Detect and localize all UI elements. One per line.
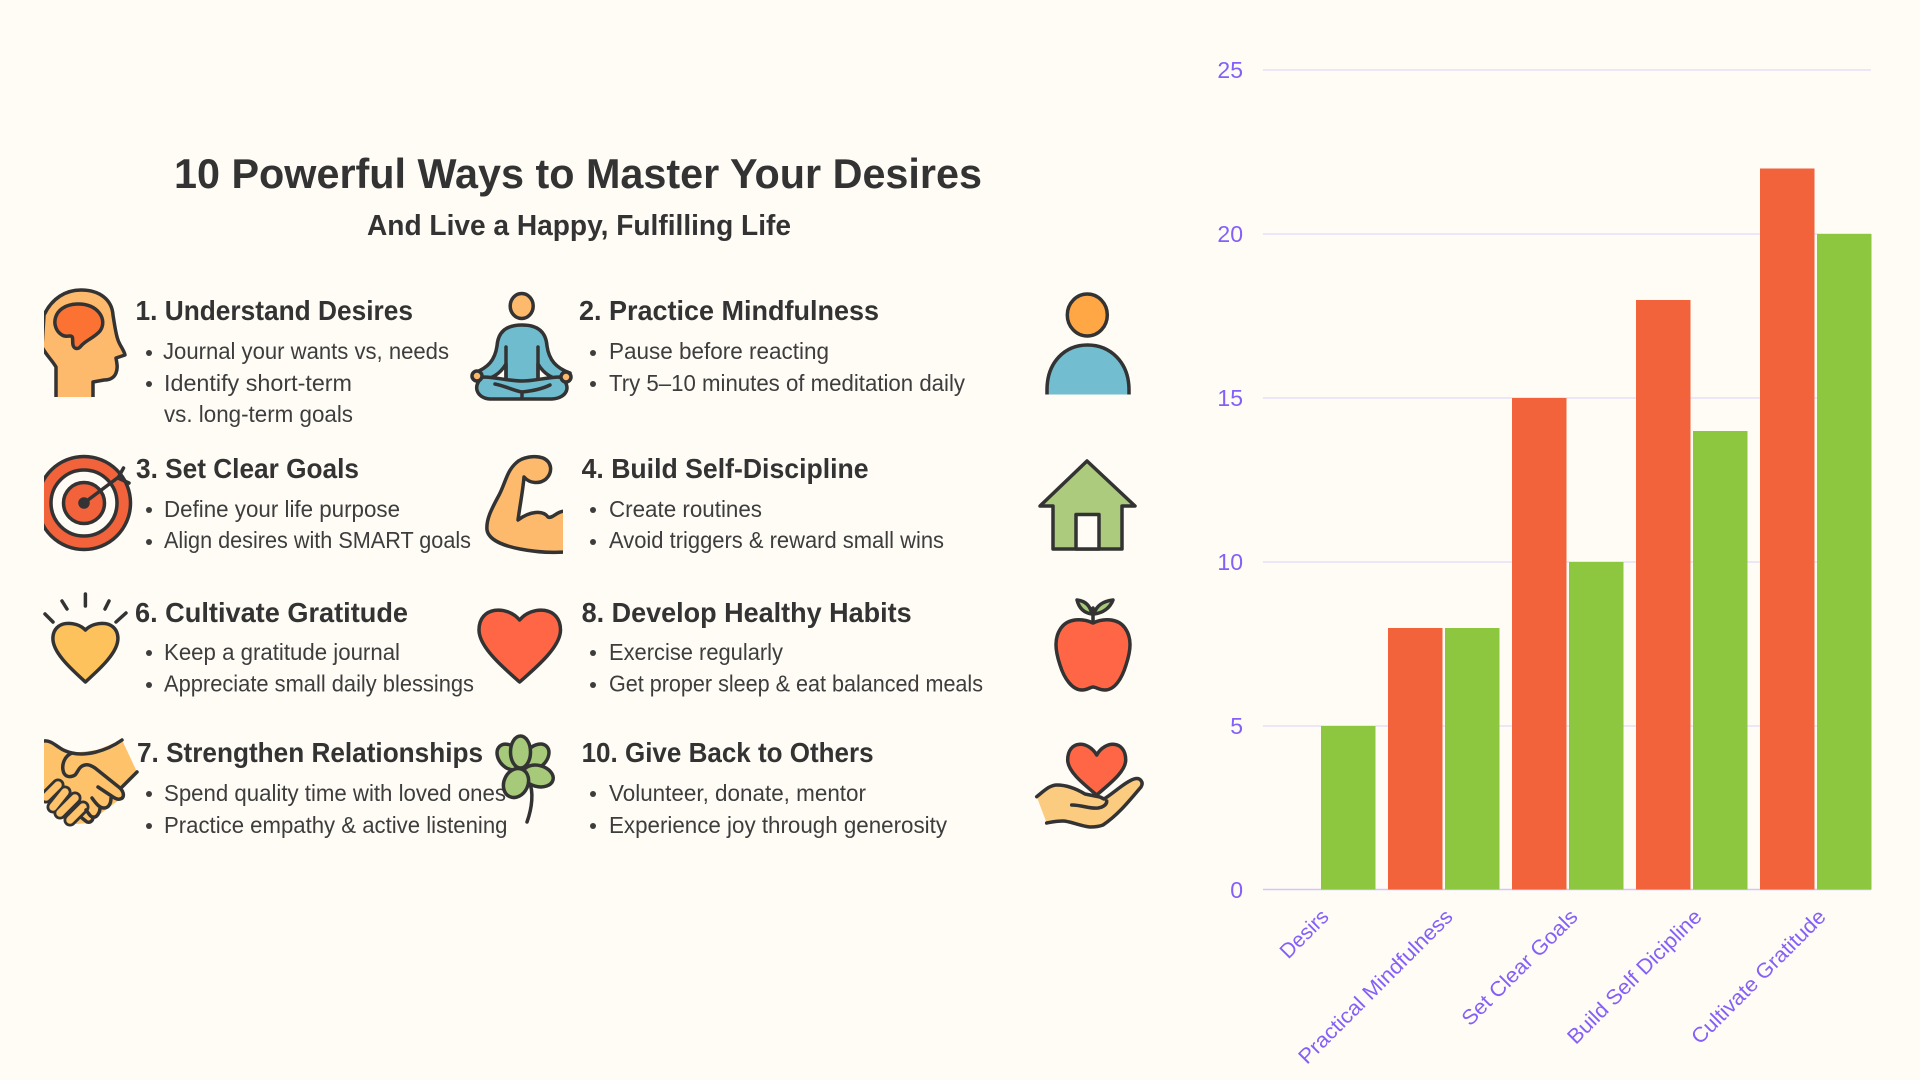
bullet list: Keep a gratitude journal xyxy=(164,639,400,665)
bullet list: Exercise regularly xyxy=(609,639,783,665)
bullet list xyxy=(590,338,965,396)
bar chart xyxy=(1217,57,1872,1069)
heading: 7. Strengthen Relationships xyxy=(137,737,483,768)
bullet list: Align desires with SMART goals xyxy=(164,527,471,553)
title: 10 Powerful Ways to Master Your Desires xyxy=(174,150,982,197)
bullet list xyxy=(146,780,508,838)
icon: flexed arm xyxy=(487,457,566,552)
item 10: give back to others xyxy=(582,737,947,838)
icon: person xyxy=(1047,294,1129,398)
bullet list: Practice empathy & active listening xyxy=(164,812,508,838)
bullet list: Identify short-term xyxy=(164,370,352,396)
icon: hand holding heart xyxy=(1037,744,1142,827)
bullet list xyxy=(590,639,983,696)
heading: 2. Practice Mindfulness xyxy=(579,295,879,326)
item 1: understand desires xyxy=(42,290,449,427)
x-axis labels xyxy=(1276,905,1831,1069)
bullet list: Journal your wants vs, needs xyxy=(163,338,449,364)
y-axis labels: 25 xyxy=(1217,57,1243,83)
bullet list: Volunteer, donate, mentor xyxy=(609,780,866,806)
x-axis labels: Set Clear Goals xyxy=(1457,905,1583,1030)
bullet list xyxy=(590,496,944,553)
gridlines xyxy=(1263,70,1871,890)
heading: 8. Develop Healthy Habits xyxy=(582,597,912,628)
x-axis labels: Practical Mindfulness xyxy=(1294,905,1458,1069)
bullet list: Pause before reacting xyxy=(609,338,829,364)
icon: red heart xyxy=(479,610,560,682)
icon: handshake xyxy=(44,740,137,824)
item 7: strengthen relationships xyxy=(44,737,508,838)
bullet list xyxy=(590,780,947,838)
bullet list: Avoid triggers & reward small wins xyxy=(609,527,944,553)
icon: clover xyxy=(492,736,556,822)
y-axis labels: 10 xyxy=(1217,549,1243,575)
bullet list: Create routines xyxy=(609,496,762,522)
item 2: practice mindfulness xyxy=(472,294,965,399)
bullet list: Spend quality time with loved ones xyxy=(164,780,506,806)
bullet list xyxy=(146,639,474,696)
bullet list xyxy=(146,496,471,553)
y-axis labels: 15 xyxy=(1217,385,1243,411)
icon: glowing yellow heart xyxy=(45,594,126,682)
heading: 1. Understand Desires xyxy=(136,295,413,326)
heading: 4. Build Self-Discipline xyxy=(582,453,869,484)
heading: 6. Cultivate Gratitude xyxy=(135,597,408,628)
x-axis labels: Desirs xyxy=(1276,905,1334,963)
y-axis labels: 5 xyxy=(1230,713,1243,739)
bullet list: vs. long-term goals xyxy=(164,401,353,427)
x-axis labels: Build Self Dicipline xyxy=(1563,905,1707,1049)
bullet list: Define your life purpose xyxy=(164,496,400,522)
heading: 10. Give Back to Others xyxy=(582,737,874,768)
y-axis labels: 0 xyxy=(1230,877,1243,903)
bars: first series xyxy=(1388,168,1814,890)
bullet list: Experience joy through generosity xyxy=(609,812,947,838)
subtitle: And Live a Happy, Fulfilling Life xyxy=(367,210,791,242)
x-axis labels: Cultivate Gratitude xyxy=(1687,905,1831,1049)
bullet list: Appreciate small daily blessings xyxy=(164,670,474,696)
icon: target with arrow xyxy=(38,456,130,550)
item 4: build self-discipline xyxy=(487,453,944,553)
icon: head with brain xyxy=(42,290,125,400)
icon: house xyxy=(1040,461,1135,549)
bullet list: Try 5–10 minutes of meditation daily xyxy=(609,370,965,396)
icon: apple xyxy=(1056,600,1130,690)
icon: meditating person xyxy=(472,294,571,399)
heading: 3. Set Clear Goals xyxy=(136,453,359,484)
item 8: develop healthy habits xyxy=(479,597,983,696)
bars: second series xyxy=(1321,234,1872,890)
y-axis labels xyxy=(1217,57,1243,903)
y-axis labels: 20 xyxy=(1217,221,1243,247)
item 6: cultivate gratitude xyxy=(45,594,474,696)
bullet list xyxy=(146,338,449,427)
item 3: set clear goals xyxy=(38,453,471,553)
bullet list: Get proper sleep & eat balanced meals xyxy=(609,670,983,696)
